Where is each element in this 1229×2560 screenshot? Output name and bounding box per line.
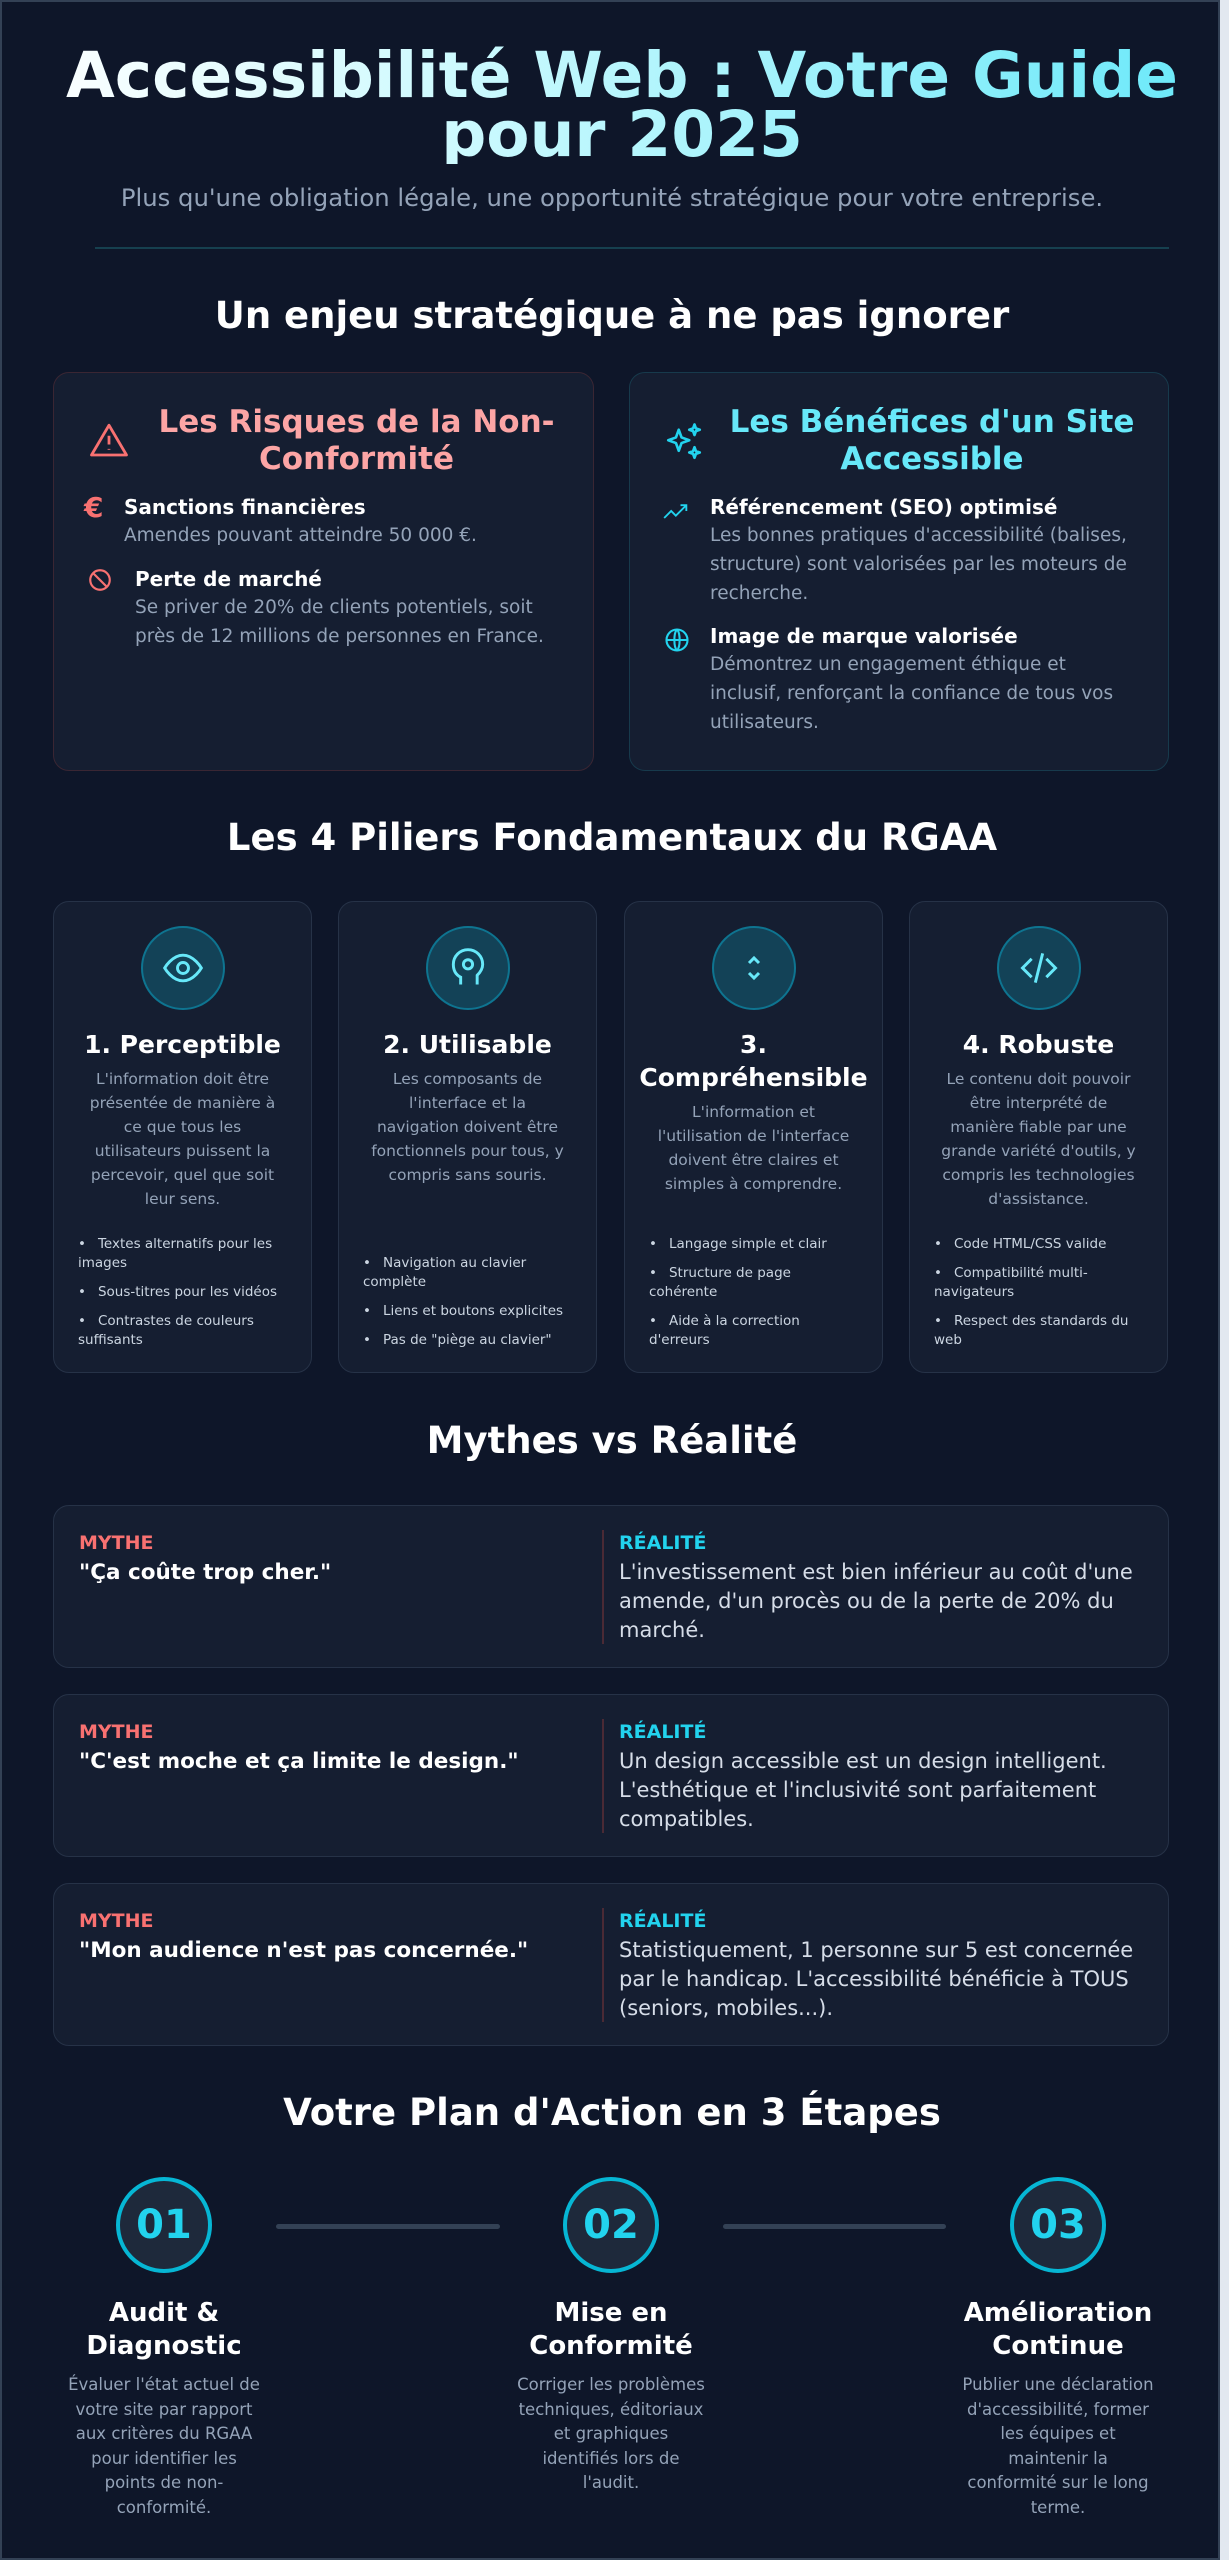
step 3: Amélioration (964, 2298, 1152, 2328)
step 1: Évaluer l'état actuel de votre site par rapport aux critères du RGAA pour identifier les points de non-conformité. (68, 2375, 260, 2516)
heading: plan: Votre Plan d'Action en 3 Étapes (283, 2091, 941, 2134)
item: perte: Se priver de 20% de clients potentiels, soit près de 12 millions de personnes en France. (135, 597, 544, 647)
myth 1: MYTHE (79, 1532, 154, 1554)
myth 2 (53, 1694, 1169, 1857)
step 2: Corriger les problèmes techniques, éditoriaux et graphiques identifiés lors de l'audit. (517, 2375, 705, 2492)
myth 2: Un design accessible est un design intelligent. L'esthétique et l'inclusivité sont parfaitement compatibles. (619, 1749, 1107, 1831)
step 3: Continue (992, 2331, 1124, 2361)
item: seo: Les bonnes pratiques d'accessibilité (balises, structure) sont valorisées par les moteurs de recherche. (710, 525, 1127, 604)
step 1: 01 (136, 2202, 192, 2248)
myth 1: "Ça coûte trop cher." (79, 1560, 331, 1585)
myth 2: RÉALITÉ (619, 1721, 706, 1743)
myth 3: MYTHE (79, 1910, 154, 1932)
pillar 2: Les composants de l'interface et la navigation doivent être fonctionnels pour tous, y compris sans souris. (371, 1070, 564, 1184)
item: sanctions: € (84, 491, 103, 524)
step 3: 03 (1030, 2202, 1086, 2248)
step 1: Audit & (109, 2298, 219, 2328)
item: image: Image de marque valorisée (710, 624, 1018, 648)
step 2: Conformité (529, 2331, 693, 2361)
pillar 2 (338, 901, 597, 1373)
step 1: Diagnostic (86, 2331, 242, 2361)
item: image: Démontrez un engagement éthique et inclusif, renforçant la confiance de tous vos utilisateurs. (710, 654, 1113, 733)
pillar 4: Code HTML/CSS valide (954, 1236, 1106, 1252)
step 1 (68, 2177, 260, 2516)
pillar 1: Sous-titres pour les vidéos (98, 1284, 277, 1300)
myth 1: L'investissement est bien inférieur au coût d'une amende, d'un procès ou de la perte de 20% du marché. (619, 1560, 1133, 1642)
title (12, 46, 1229, 164)
pillar 1: Textes alternatifs pour les images (78, 1236, 272, 1271)
pillar 1: L'information doit être présentée de manière à ce que tous les utilisateurs puissent la percevoir, quel que soit leur sens. (90, 1070, 275, 1208)
subtitle: Plus qu'une obligation légale, une opportunité stratégique pour votre entreprise. (121, 183, 1103, 212)
step 2 (517, 2177, 705, 2492)
myth 2: "C'est moche et ça limite le design." (79, 1749, 519, 1774)
pillar 4: 4. Robuste (963, 1030, 1114, 1059)
pillar 3 (624, 901, 883, 1373)
myth 1 (53, 1505, 1169, 1668)
connector 2 (723, 2224, 946, 2229)
item: image (665, 624, 1113, 733)
icon: eye (140, 926, 224, 1010)
item: sanctions: Sanctions financières (124, 495, 366, 519)
myth 2: MYTHE (79, 1721, 154, 1743)
panel: benefices (629, 372, 1169, 771)
heading: piliers: Les 4 Piliers Fondamentaux du RGAA (227, 816, 997, 859)
icon: hand (426, 926, 510, 1010)
icon: chevrons (712, 926, 796, 1010)
step 3: Publier une déclaration d'accessibilité, former les équipes et maintenir la conformité sur le long terme. (962, 2375, 1154, 2516)
title: pour 2025 (441, 98, 803, 171)
pillar 3: Structure de page cohérente (649, 1265, 791, 1300)
pillar 4: Le contenu doit pouvoir être interprété de manière fiable par une grande variété d'outils, y compris les technologies d'assistance. (941, 1070, 1136, 1208)
step 2: 02 (583, 2202, 639, 2248)
icon: code (996, 926, 1080, 1010)
myth 3: RÉALITÉ (619, 1910, 706, 1932)
myth 3: "Mon audience n'est pas concernée." (79, 1938, 528, 1963)
pillar 1: Contrastes de couleurs suffisants (78, 1313, 254, 1348)
title: Accessibilité Web : Votre Guide (66, 39, 1178, 112)
item: sanctions (84, 491, 477, 546)
connector 1 (276, 2224, 500, 2229)
myth 3 (53, 1883, 1169, 2046)
pillar 1 (53, 901, 312, 1373)
pillar 2: Pas de "piège au clavier" (383, 1332, 552, 1348)
pillar 3: 3. (740, 1030, 767, 1059)
item: seo (664, 495, 1127, 604)
icon: warning (90, 424, 128, 456)
step 2: Mise en (554, 2298, 668, 2328)
pillar 1: 1. Perceptible (84, 1030, 281, 1059)
pillar 3: Compréhensible (639, 1063, 868, 1092)
item: sanctions: Amendes pouvant atteindre 50 000 €. (124, 525, 477, 546)
step 3 (962, 2177, 1154, 2516)
heading: enjeu: Un enjeu stratégique à ne pas ignorer (215, 294, 1009, 337)
pillar 2: 2. Utilisable (383, 1030, 552, 1059)
pillar 2: Liens et boutons explicites (383, 1303, 563, 1319)
pillar 2: Navigation au clavier complète (363, 1255, 526, 1290)
pillar 4: Respect des standards du web (934, 1313, 1128, 1348)
icon: sparkles (666, 423, 702, 460)
pillar 4: Compatibilité multi-navigateurs (934, 1265, 1088, 1300)
panel: risques (53, 372, 594, 771)
myth 1: RÉALITÉ (619, 1532, 706, 1554)
item: seo: Référencement (SEO) optimisé (710, 495, 1057, 519)
myth 3: Statistiquement, 1 personne sur 5 est concernée par le handicap. L'accessibilité bénéficie à TOUS (seniors, mobiles...). (619, 1938, 1133, 2020)
pillar 4 (909, 901, 1168, 1373)
heading: mythes: Mythes vs Réalité (427, 1419, 797, 1462)
pillar 3: Langage simple et clair (669, 1236, 827, 1252)
benefices title: Les Bénéfices d'un Site Accessible (730, 404, 1134, 477)
pillar 3: Aide à la correction d'erreurs (649, 1313, 800, 1348)
item: perte: Perte de marché (135, 567, 322, 591)
pillar 3: L'information et l'utilisation de l'interface doivent être claires et simples à comprendre. (658, 1103, 849, 1193)
item: perte (89, 567, 544, 647)
risques title: Les Risques de la Non-Conformité (158, 404, 555, 477)
